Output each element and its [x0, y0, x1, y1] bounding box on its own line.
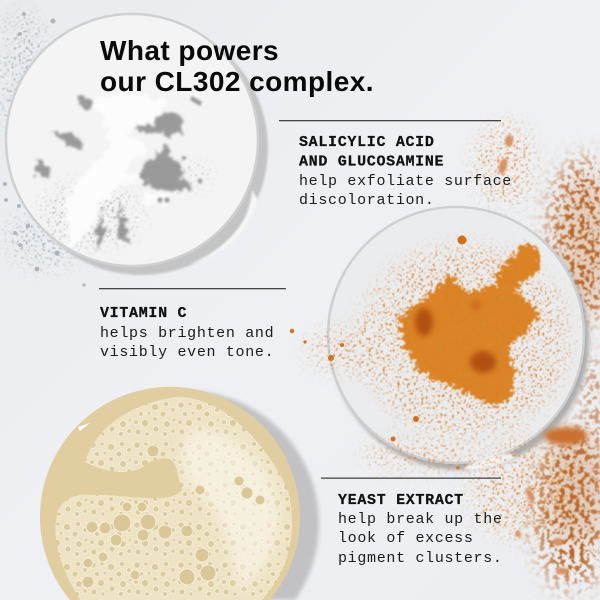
callout: vitamin C: visibly even tone.	[100, 344, 274, 361]
right side soft tint	[548, 175, 600, 545]
panel: yeast foam blob	[40, 387, 319, 600]
callout: yeast extract: YEAST EXTRACT	[338, 492, 464, 509]
lower right clump	[544, 427, 588, 445]
callout: salicylic acid and glucosamine: SALICYLIC ACID	[299, 134, 435, 151]
streak clumps	[497, 135, 568, 574]
callout: salicylic acid and glucosamine: discoloration.	[299, 192, 435, 209]
callout: vitamin C: VITAMIN C	[100, 305, 187, 322]
dark powder patches	[415, 300, 496, 373]
callout: yeast extract	[321, 478, 503, 567]
callout: yeast extract: help break up the	[338, 511, 503, 528]
rim highlight	[190, 190, 258, 264]
dish lip highlight	[464, 450, 516, 474]
powder mound	[62, 108, 166, 246]
panel: orange powder dish	[290, 123, 600, 590]
callout: salicylic acid and glucosamine: help exfoliate surface	[299, 173, 512, 190]
right side grain	[534, 158, 600, 590]
large bubbles	[82, 445, 265, 588]
callout: yeast extract: look of excess	[338, 530, 474, 547]
powder shadows	[36, 95, 192, 250]
callout: vitamin C: helps brighten and	[100, 325, 274, 342]
scattered white grains	[3, 12, 86, 287]
orange clumps	[290, 236, 466, 470]
panel: white powder dish	[0, 10, 268, 287]
callout: salicylic acid and glucosamine	[279, 120, 512, 209]
dish glass	[6, 14, 258, 266]
foam layer	[55, 397, 292, 600]
dish glass	[328, 207, 584, 463]
title: our CL302 complex.	[100, 66, 374, 97]
orange powder mound	[398, 243, 540, 405]
powder flecks	[157, 96, 202, 203]
dish shadow	[331, 212, 589, 470]
dish shadow	[14, 21, 268, 275]
white foam highlight	[182, 429, 279, 590]
fine dust	[307, 123, 570, 538]
callout: salicylic acid and glucosamine: AND GLUCOSAMINE	[299, 154, 444, 170]
blob shadow	[53, 391, 319, 600]
title: What powers	[100, 35, 279, 66]
callout: vitamin C	[99, 288, 286, 361]
title	[100, 35, 374, 97]
edge highlight	[78, 423, 90, 431]
powder texture	[398, 243, 540, 405]
blob base	[40, 387, 300, 600]
powder streak dust	[40, 165, 210, 247]
foam patch	[55, 397, 292, 600]
grey speckle dust	[0, 10, 83, 268]
callout: yeast extract: pigment clusters.	[338, 550, 503, 567]
